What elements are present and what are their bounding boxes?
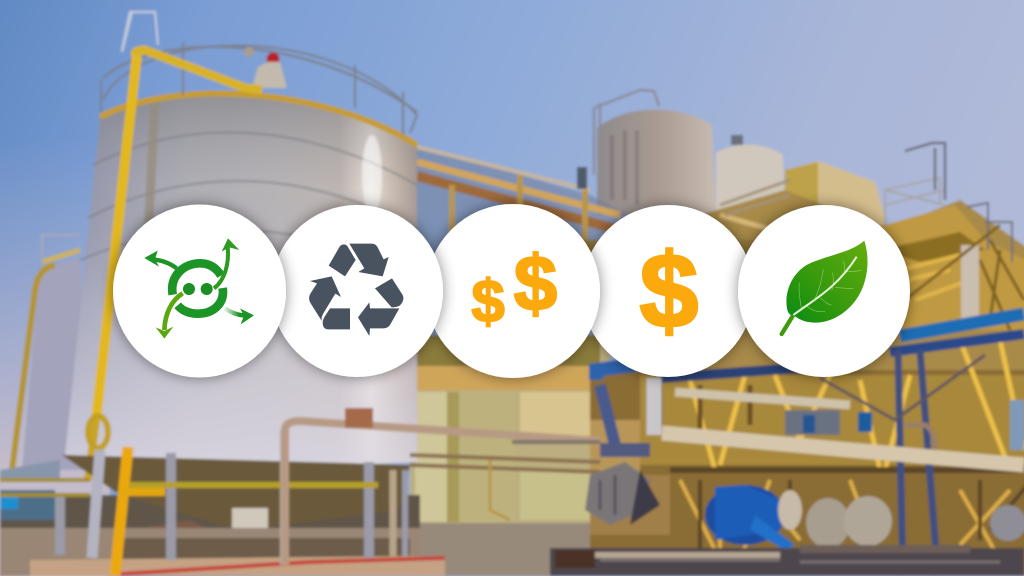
arrow: up left: [144, 251, 177, 268]
lower machinery: [550, 462, 1024, 576]
ground: [0, 528, 445, 576]
tank valve with red cap: [244, 47, 287, 88]
arrow: down left: [156, 293, 183, 339]
circle badge: two dollars: [426, 204, 600, 378]
icon: recycling arrows: [309, 244, 403, 336]
back tank: [12, 235, 90, 470]
arrow: up right: [214, 238, 239, 288]
front storage tank: [65, 94, 417, 470]
icon: small dollar sign: $: [471, 268, 505, 335]
icon: green leaf: [782, 241, 868, 334]
support columns: [60, 430, 405, 565]
circle badge: dispersion: [113, 204, 286, 378]
center dots: [183, 283, 213, 295]
second distant silo: [716, 135, 786, 230]
cream horizontal pipe: [512, 378, 1024, 465]
circle badge: sustained savings (single dollar): [582, 205, 754, 377]
arrow: right: [225, 308, 254, 324]
circle badge: recycling: [271, 205, 443, 377]
circle badge: leaf: [738, 205, 910, 377]
rust horizontal pipe: [285, 408, 600, 565]
yellow riser pipe: [88, 50, 262, 480]
tank railing: [101, 12, 417, 135]
icon: dollar sign: $: [640, 232, 698, 350]
right side scaffold: [700, 143, 1024, 400]
yellow control house: [785, 161, 885, 240]
right lower plant: [590, 340, 1024, 576]
yellow ground pipes: [0, 447, 378, 576]
icon: large dollar sign: $: [514, 239, 557, 327]
central building: [410, 335, 610, 576]
middle yellow pipe rack: [417, 145, 790, 300]
blue overhead pipe: [596, 314, 1024, 576]
distant silo: [594, 90, 716, 215]
hopper base: [0, 455, 420, 550]
icon: green ring with arrows: [144, 238, 254, 339]
ring arcs: [172, 263, 221, 295]
